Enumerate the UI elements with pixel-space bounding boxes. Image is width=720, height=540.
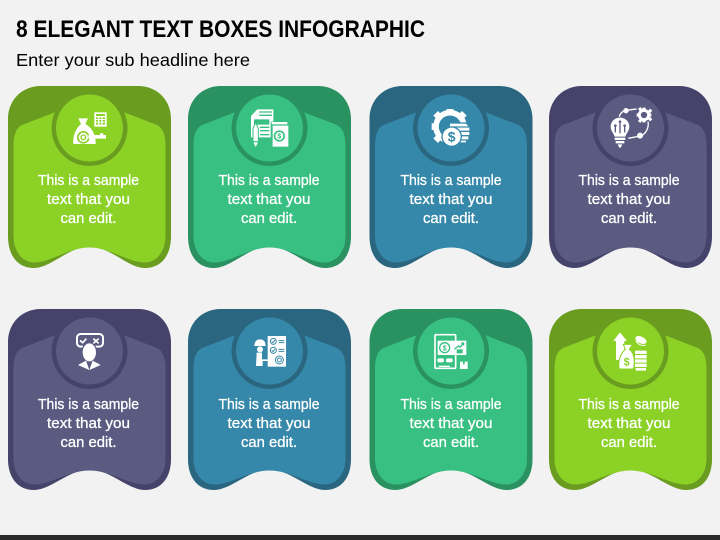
icon: growth arrow, money bag and coins — [613, 332, 648, 371]
icon: documents, pencil and dollar jar — [251, 109, 288, 147]
text block — [400, 173, 502, 227]
panel: card 5 purple — [8, 309, 171, 490]
text block — [38, 397, 139, 451]
text block — [38, 173, 139, 227]
text block: text that you — [47, 416, 130, 432]
icon: gear with dollar coins — [432, 109, 469, 147]
panel: card 7 green — [370, 309, 532, 490]
text block: This is a sample — [578, 397, 680, 413]
icon: light bulb with gear cycle — [611, 107, 652, 148]
text block: text that you — [588, 192, 670, 208]
text block: can edit. — [601, 211, 657, 227]
text block: This is a sample — [400, 173, 502, 189]
text block: can edit. — [423, 211, 479, 227]
icon: phone with dollar and growth chart — [435, 335, 468, 369]
text block: This is a sample — [218, 173, 320, 189]
text block — [218, 397, 320, 451]
panel: card 6 teal — [188, 309, 351, 490]
text block: text that you — [410, 416, 492, 432]
icon: documents, pencil and dollar jar: $ — [277, 132, 281, 141]
text block: can edit. — [60, 435, 116, 451]
text block: can edit. — [423, 435, 479, 451]
footer bar — [0, 535, 720, 540]
text block: text that you — [588, 416, 670, 432]
text block: This is a sample — [38, 397, 139, 413]
text block: This is a sample — [578, 173, 680, 189]
text block: This is a sample — [218, 397, 320, 413]
panel: card 8 lime — [549, 309, 712, 490]
text block — [218, 173, 320, 227]
text block: This is a sample — [400, 397, 502, 413]
text block: This is a sample — [38, 173, 139, 189]
text block — [578, 397, 680, 451]
subtitle: Enter your sub headline here — [16, 50, 250, 70]
panel: card 1 lime — [8, 86, 171, 268]
icon: person with check and cross bubble — [77, 334, 103, 370]
panel: card 2 green — [188, 86, 351, 268]
text block: text that you — [228, 416, 310, 432]
text block: can edit. — [241, 435, 297, 451]
text block: text that you — [47, 192, 130, 208]
text block: can edit. — [241, 211, 297, 227]
panel: card 4 purple — [549, 86, 712, 268]
text block: can edit. — [60, 211, 116, 227]
icon: money bag with key and calculator — [73, 112, 107, 144]
title: 8 ELEGANT TEXT BOXES INFOGRAPHIC — [16, 16, 425, 43]
icon: gear with dollar coins: $ — [448, 129, 456, 145]
text block: can edit. — [601, 435, 657, 451]
icon: growth arrow, money bag and coins: $ — [624, 356, 630, 368]
icon: phone with dollar and growth chart: $ — [443, 343, 447, 352]
panel: card 3 teal — [370, 86, 532, 268]
text block: text that you — [228, 192, 310, 208]
icon: engineer with checklist — [254, 336, 286, 367]
text block — [578, 173, 680, 227]
text block: text that you — [410, 192, 492, 208]
text block — [400, 397, 502, 451]
